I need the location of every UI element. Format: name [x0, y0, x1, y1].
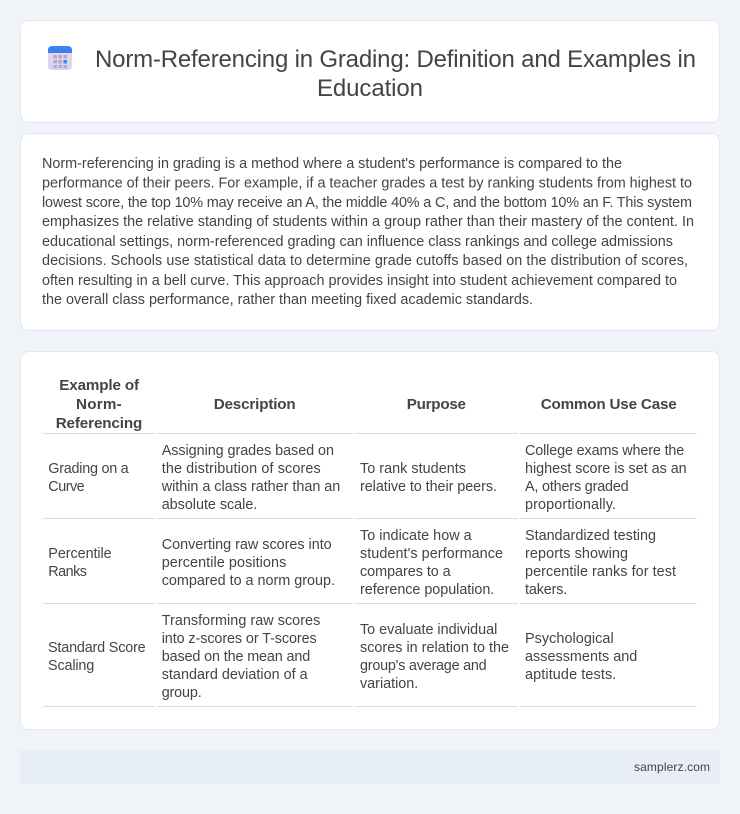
table row: grading on a curve: the distribution of scores [162, 461, 321, 477]
table row: percentile ranks: compared to a norm group. [162, 573, 335, 589]
table row: percentile ranks: Standardized testing [525, 528, 656, 544]
panel: header card [20, 20, 720, 122]
title: Norm-Referencing in Grading: Definition and Examples in [95, 46, 696, 73]
text block: definition paragraph: often resulting in a bell curve. This approach provides insight into student achievement compared to [42, 273, 677, 289]
panel: definition paragraph card [20, 134, 720, 330]
table row: standard score scaling: Standard Score [48, 640, 146, 656]
table header row: Example of [59, 377, 140, 394]
table row: percentile ranks: Converting raw scores into [162, 537, 332, 553]
table row: standard score scaling: To evaluate individual [360, 622, 497, 638]
table row: standard score scaling: based on the mean and [162, 649, 310, 665]
text block: definition paragraph: lowest score, the top 10% may receive an A, the middle 40% a C, and the bottom 10% an F. This system [42, 195, 692, 211]
table row: standard score scaling: assessments and [525, 649, 637, 665]
table row: grading on a curve: Curve [48, 479, 85, 495]
table row: standard score scaling: variation. [360, 676, 418, 692]
table row: percentile ranks: To indicate how a [360, 528, 472, 544]
table row: standard score scaling [43, 613, 697, 707]
table row: standard score scaling: into z-scores or T-scores [162, 631, 317, 647]
table row: percentile ranks [43, 528, 697, 604]
footer bar: samplerz.com [634, 760, 710, 774]
table row: grading on a curve: Grading on a [48, 461, 129, 477]
table row: percentile ranks: compares to a [360, 564, 451, 580]
text block: definition paragraph [42, 156, 694, 308]
table row: percentile ranks: Ranks [48, 564, 87, 580]
table row: percentile ranks: percentile ranks for test [525, 564, 676, 580]
table row: percentile ranks: student's performance [360, 546, 503, 562]
table row: grading on a curve: College exams where the [525, 443, 684, 459]
table row: standard score scaling: scores in relation to the [360, 640, 509, 656]
table row: percentile ranks: percentile positions [162, 555, 286, 571]
table row: grading on a curve: highest score is set as an [525, 461, 687, 477]
text block: definition paragraph: educational settings, norm-referenced grading can influence class rankings and college admissions [42, 234, 673, 250]
text block: definition paragraph: emphasizes the relative standing of students within a group rather than their mastery of the content. In [42, 214, 694, 230]
table row: grading on a curve: To rank students [360, 461, 466, 477]
table row: percentile ranks: takers. [525, 582, 567, 598]
table row: percentile ranks: reference population. [360, 582, 494, 598]
table row: percentile ranks: Percentile [48, 546, 112, 562]
icon: calendar [48, 46, 72, 70]
text block: definition paragraph: the overall class performance, rather than meeting fixed academic standards. [42, 292, 533, 308]
table row: standard score scaling: standard deviation of a [162, 667, 308, 683]
text block: definition paragraph: decisions. Schools use statistical data to determine grade cutoffs based on the distribution of scores, [42, 253, 688, 269]
table row: grading on a curve: within a class rather than an [161, 479, 340, 495]
table header row: Referencing [56, 415, 142, 432]
table row: standard score scaling: group. [162, 685, 202, 701]
table row: grading on a curve: absolute scale. [162, 497, 257, 513]
title: Education [317, 75, 423, 102]
table row: standard score scaling: group's average and [360, 658, 487, 674]
table row: standard score scaling: Transforming raw scores [162, 613, 320, 629]
text block: definition paragraph: Norm-referencing in grading is a method where a student's performance is compared to the [42, 156, 622, 172]
panel: examples table card [20, 352, 720, 730]
table row: percentile ranks: reports showing [525, 546, 628, 562]
footer bar [20, 750, 720, 784]
title [95, 46, 696, 102]
table row: grading on a curve: relative to their peers. [360, 479, 497, 495]
table header row: Norm- [76, 396, 122, 413]
table row: grading on a curve: A, others graded [525, 479, 629, 495]
table header row: Purpose [407, 396, 466, 413]
table row: standard score scaling: Psychological [525, 631, 614, 647]
table row: grading on a curve: Assigning grades based on [162, 443, 334, 459]
text block: definition paragraph: performance of their peers. For example, if a teacher grades a test by ranking students from highest to [42, 176, 692, 192]
table header row: Common Use Case [541, 396, 677, 413]
table row: standard score scaling: aptitude tests. [525, 667, 616, 683]
table header row: Description [214, 396, 296, 413]
table row: standard score scaling: Scaling [48, 658, 94, 674]
table header row [43, 377, 697, 434]
table row: grading on a curve [43, 443, 697, 519]
table row: grading on a curve: proportionally. [525, 497, 616, 513]
